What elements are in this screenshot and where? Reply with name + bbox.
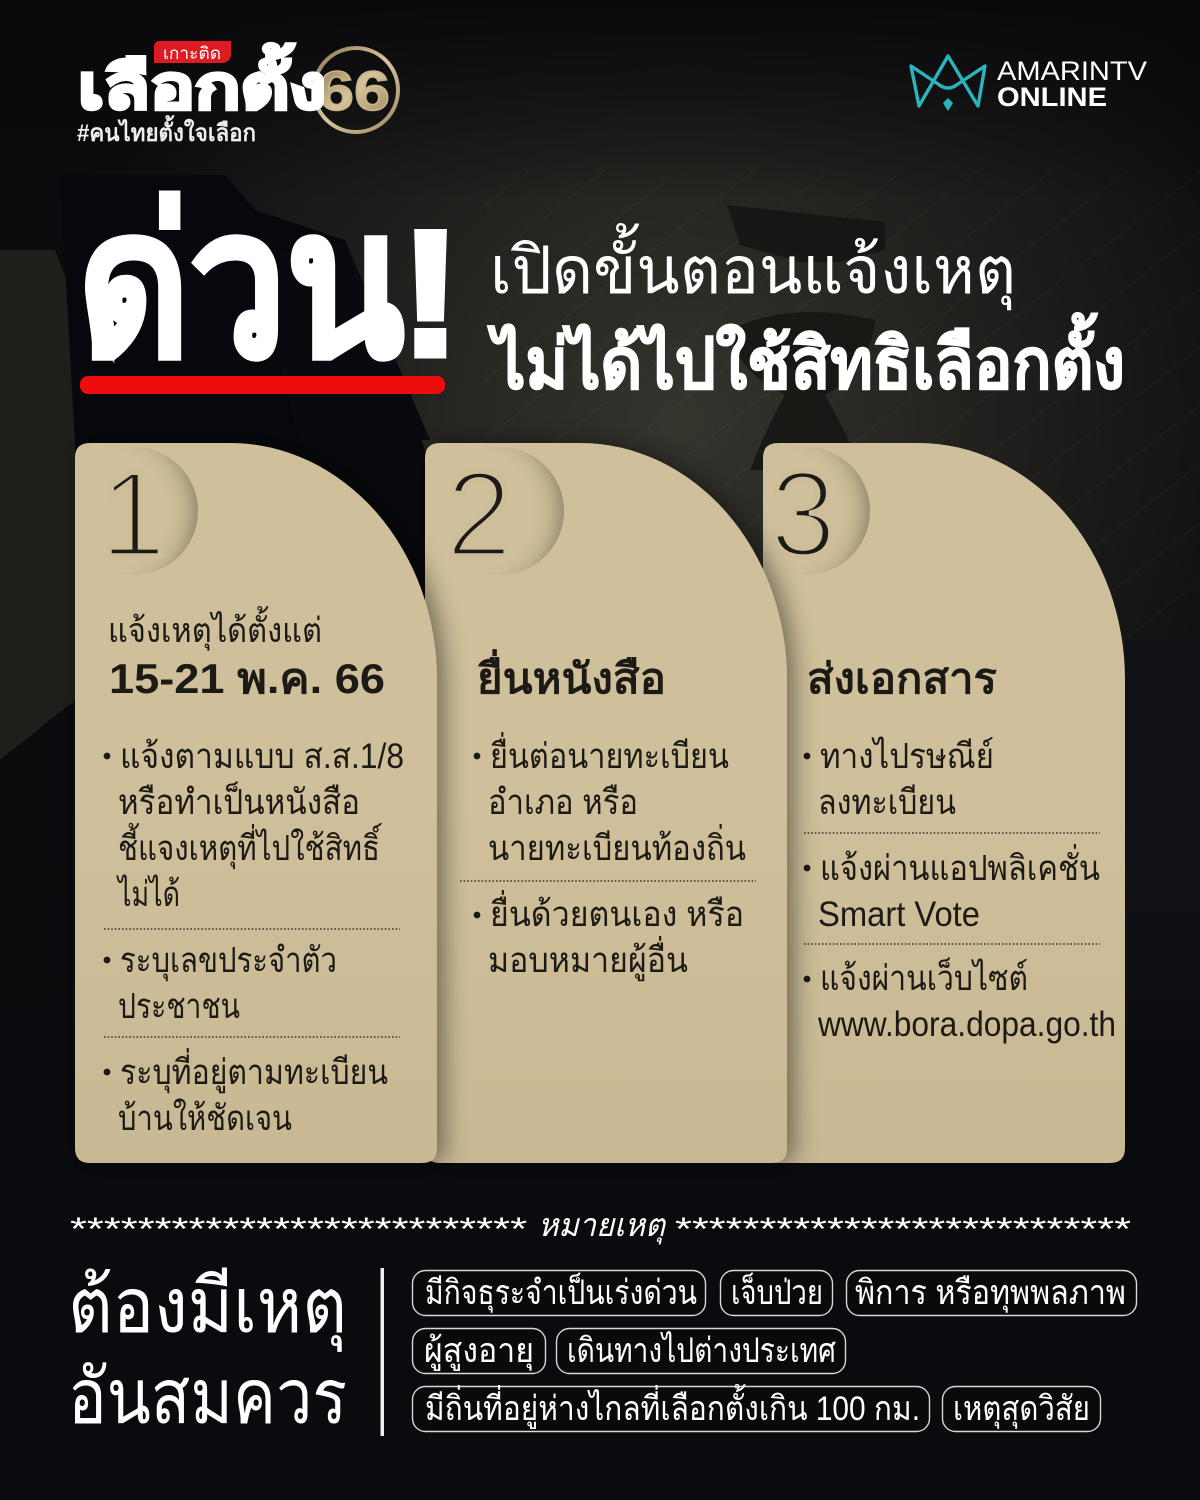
heading: must have reasonable cause: ต้องมีเหตุ (68, 1264, 347, 1352)
step 1 list: ชี้แจงเหตุที่ไปใช้สิทธิ์ (118, 822, 383, 869)
subtitle line 2: ไม่ได้ไปใช้สิทธิเลือกตั้ง (487, 312, 1125, 403)
pill: travel abroad: เดินทางไปต่างประเทศ (567, 1331, 836, 1370)
step 1 list: ไม่ได้ (116, 874, 180, 914)
note heading (70, 1207, 1131, 1247)
step 1 list: แจ้งตามแบบ ส.ส.1/8 (120, 737, 404, 776)
step 1 list: ประชาชน (118, 987, 240, 1026)
heading: must have reasonable cause (68, 1264, 347, 1440)
headline subtitle (487, 223, 1125, 403)
pill: urgent business: มีกิจธุระจำเป็นเร่งด่วน (425, 1272, 697, 1313)
step 1 intro: แจ้งเหตุได้ตั้งแต่ (108, 606, 322, 651)
logo wordmark: เลือกตั้ง (78, 43, 326, 121)
step 1 list (104, 737, 404, 1138)
step 3 list: ทางไปรษณีย์ (820, 736, 994, 776)
brand sub-name: ONLINE (997, 82, 1107, 112)
reason pills (412, 1270, 1136, 1432)
step 3 list (804, 736, 1116, 1044)
step 2 list: ยื่นต่อนายทะเบียน (490, 732, 729, 776)
panel: step 1 report period (70, 443, 437, 1163)
step 3 list: www.bora.dopa.go.th (817, 1005, 1116, 1044)
note heading: หมายเหตุ (538, 1207, 667, 1245)
logo: election 66 (77, 41, 398, 147)
pill: sick: เจ็บป่วย (731, 1272, 823, 1312)
red underline (80, 376, 445, 394)
step 1 list: ระบุเลขประจำตัว (120, 941, 337, 981)
logo tag: red label: เกาะติด (163, 44, 221, 63)
note heading: *************************** (675, 1211, 1131, 1247)
step 2 list: อำเภอ หรือ (488, 783, 638, 822)
monument silhouette (727, 205, 885, 470)
step 1 list: หรือทำเป็นหนังสือ (118, 781, 360, 822)
step 2 list (460, 732, 756, 981)
step 2 list: ยื่นด้วยตนเอง หรือ (490, 890, 744, 934)
logo badge: 66 ring: 66 (318, 59, 390, 122)
step 1 list: บ้านให้ชัดเจน (118, 1098, 292, 1138)
panel: step 2 submit letter (425, 443, 787, 1163)
logo tag: red label (154, 41, 231, 63)
headline word: ด่วน (78, 170, 404, 399)
panel: step 3 send documents (742, 443, 1125, 1163)
step 1 list: ระบุที่อยู่ตามทะเบียน (120, 1048, 388, 1093)
headline word: ! (401, 194, 460, 393)
headline: urgent (78, 170, 460, 399)
step 2 list: นายทะเบียนท้องถิ่น (488, 824, 746, 868)
step 3 heading: ส่งเอกสาร (807, 655, 997, 702)
step 3 list: ลงทะเบียน (818, 783, 956, 822)
logo hashtag: #คนไทยตั้งใจเลือก (77, 114, 256, 147)
icon: crown (911, 56, 985, 111)
step number 3: 3 (770, 446, 836, 582)
pill: elderly: ผู้สูงอายุ (424, 1332, 534, 1371)
brand name: AMARINTV (997, 56, 1147, 86)
step 2 heading: ยื่นหนังสือ (477, 649, 666, 702)
step 3 list: แจ้งผ่านเว็บไซต์ (820, 957, 1028, 998)
pill: far residence: มีถิ่นที่อยู่ห่างไกลที่เลือกตั้งเกิน 100 กม. (425, 1384, 920, 1429)
step number 2: 2 (446, 446, 512, 582)
step number 1: 1 (100, 446, 166, 582)
logo: Amarin TV Online (911, 56, 1147, 112)
step 2 list: มอบหมายผู้อื่น (488, 936, 688, 981)
step 3 list: แจ้งผ่านแอปพลิเคชั่น (820, 844, 1100, 888)
pill: force majeure: เหตุสุดวิสัย (953, 1390, 1090, 1429)
note heading: *************************** (70, 1211, 527, 1247)
pill: disabled: พิการ หรือทุพพลภาพ (855, 1274, 1126, 1313)
subtitle line 1: เปิดขั้นตอนแจ้งเหตุ (490, 223, 1016, 311)
logo badge: 66 ring (314, 48, 398, 132)
heading: must have reasonable cause: อันสมควร (68, 1355, 347, 1440)
step 3 list: Smart Vote (818, 895, 980, 934)
step 1 date: 15-21 พ.ค. 66 (109, 655, 385, 702)
